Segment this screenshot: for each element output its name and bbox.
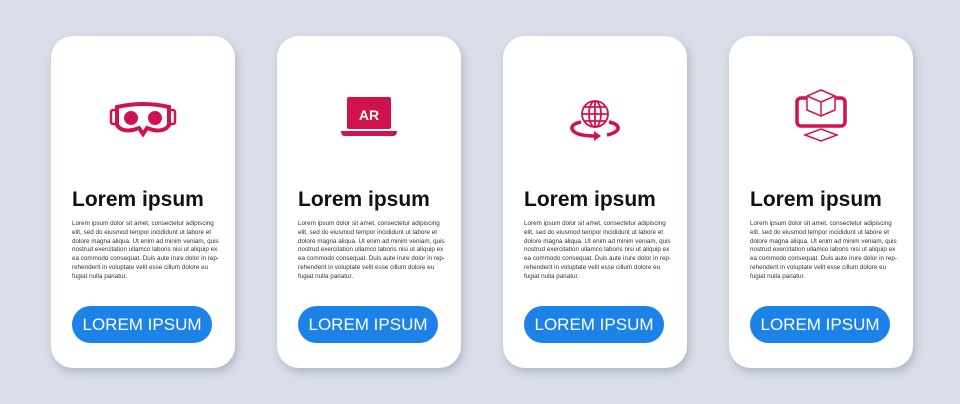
body text: fugiat nulla pariatur. [750,273,805,280]
icon: rotating globe [570,100,620,141]
body text: ea commodo consequat. Duis aute irure dolor in rep- [750,255,897,262]
body text: dolore magna aliqua. Ut enim ad minim veniam, quis [750,238,897,245]
icon: AR laptop [341,97,397,136]
button [750,306,890,343]
body text: ea commodo consequat. Duis aute irure dolor in rep- [298,255,445,262]
body text: rehenderit in voluptate velit esse cillum dolore eu [72,264,208,271]
body text: fugiat nulla pariatur. [298,273,353,280]
body text: nostrud exercitation ullamco laboris nisi ut aliquip ex [298,246,443,253]
button [524,306,664,343]
button [298,306,438,343]
body text: elit, sed do eiusmod tempor incididunt ut labore et [524,229,663,236]
body text: Lorem ipsum dolor sit amet, consectetur adipiscing [524,220,666,227]
body text: rehenderit in voluptate velit esse cillum dolore eu [524,264,660,271]
icon: VR glasses [110,102,176,138]
icon: AR laptop: AR [359,107,379,123]
body text: elit, sed do eiusmod tempor incididunt ut labore et [750,229,889,236]
card 4: AR cube phone [729,36,913,368]
button: LOREM IPSUM [82,315,202,334]
heading: Lorem ipsum [72,188,204,211]
card 3: globe [503,36,687,368]
body text: nostrud exercitation ullamco laboris nisi ut aliquip ex [72,246,217,253]
body text: elit, sed do eiusmod tempor incididunt ut labore et [72,229,211,236]
icon: phone with cube [795,89,847,142]
body text: dolore magna aliqua. Ut enim ad minim veniam, quis [524,238,671,245]
body text: elit, sed do eiusmod tempor incididunt ut labore et [298,229,437,236]
body text: dolore magna aliqua. Ut enim ad minim veniam, quis [298,238,445,245]
body text: rehenderit in voluptate velit esse cillum dolore eu [298,264,434,271]
body text [524,220,671,280]
body text: fugiat nulla pariatur. [524,273,579,280]
card 2: AR laptop [277,36,461,368]
body text: nostrud exercitation ullamco laboris nisi ut aliquip ex [750,246,895,253]
body text: ea commodo consequat. Duis aute irure dolor in rep- [524,255,671,262]
heading: Lorem ipsum [750,188,882,211]
card 1: VR headset [51,36,235,368]
button: LOREM IPSUM [308,315,428,334]
body text [72,220,219,280]
body text: Lorem ipsum dolor sit amet, consectetur adipiscing [72,220,214,227]
heading: Lorem ipsum [524,188,656,211]
body text: fugiat nulla pariatur. [72,273,127,280]
button: LOREM IPSUM [534,315,654,334]
button [72,306,212,343]
body text: Lorem ipsum dolor sit amet, consectetur adipiscing [750,220,892,227]
heading: Lorem ipsum [298,188,430,211]
body text: ea commodo consequat. Duis aute irure dolor in rep- [72,255,219,262]
body text [298,220,445,280]
body text: Lorem ipsum dolor sit amet, consectetur adipiscing [298,220,440,227]
body text: nostrud exercitation ullamco laboris nisi ut aliquip ex [524,246,669,253]
body text: rehenderit in voluptate velit esse cillum dolore eu [750,264,886,271]
body text [750,220,897,280]
button: LOREM IPSUM [760,315,880,334]
body text: dolore magna aliqua. Ut enim ad minim veniam, quis [72,238,219,245]
